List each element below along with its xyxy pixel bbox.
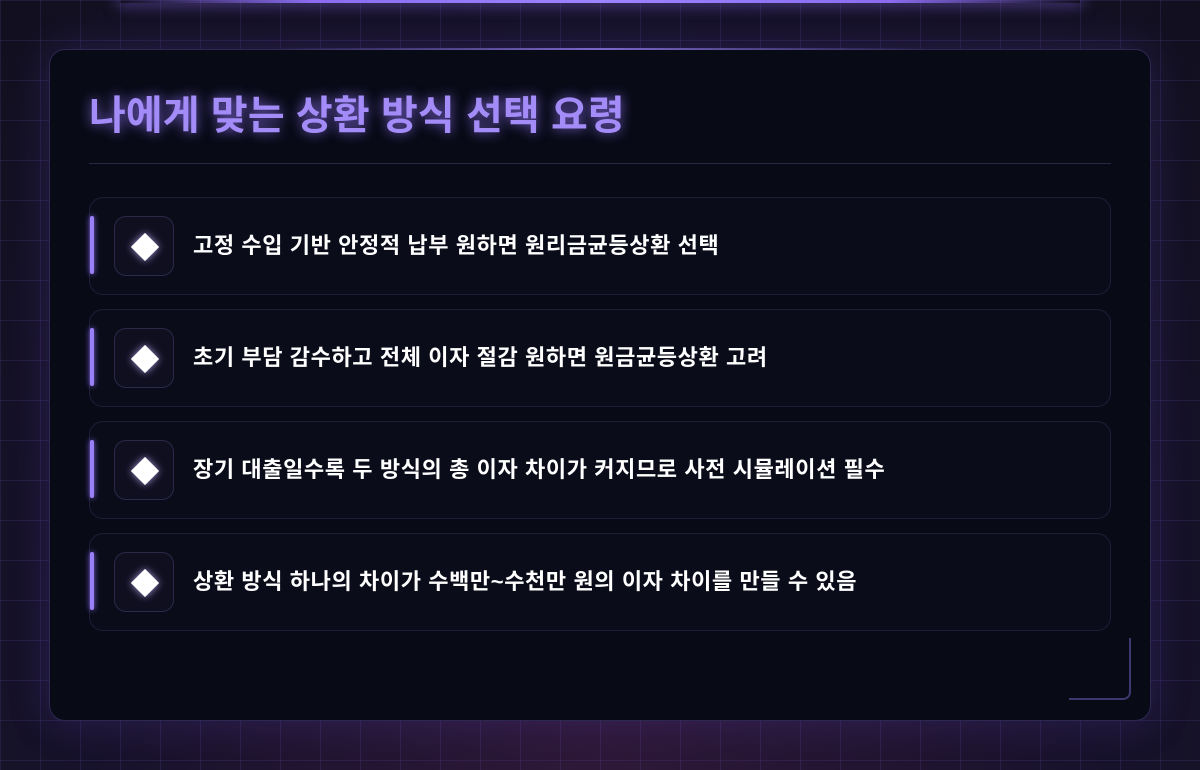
item 4 [89, 533, 1111, 631]
text 4: 상환 방식 하나의 차이가 수백만~수천만 원의 이자 차이를 만들 수 있음 [193, 569, 857, 594]
icon: diamond [114, 552, 174, 612]
item 2 [89, 309, 1111, 407]
title: 나에게 맞는 상환 방식 선택 요령 [89, 94, 625, 138]
icon: diamond [114, 328, 174, 388]
item 1 [89, 197, 1111, 295]
icon: diamond [114, 440, 174, 500]
text 3: 장기 대출일수록 두 방식의 총 이자 차이가 커지므로 사전 시뮬레이션 필수 [193, 457, 885, 482]
item 3 [89, 421, 1111, 519]
text 2: 초기 부담 감수하고 전체 이자 절감 원하면 원금균등상환 고려 [193, 345, 768, 370]
text 1: 고정 수입 기반 안정적 납부 원하면 원리금균등상환 선택 [193, 233, 719, 258]
icon: diamond [114, 216, 174, 276]
